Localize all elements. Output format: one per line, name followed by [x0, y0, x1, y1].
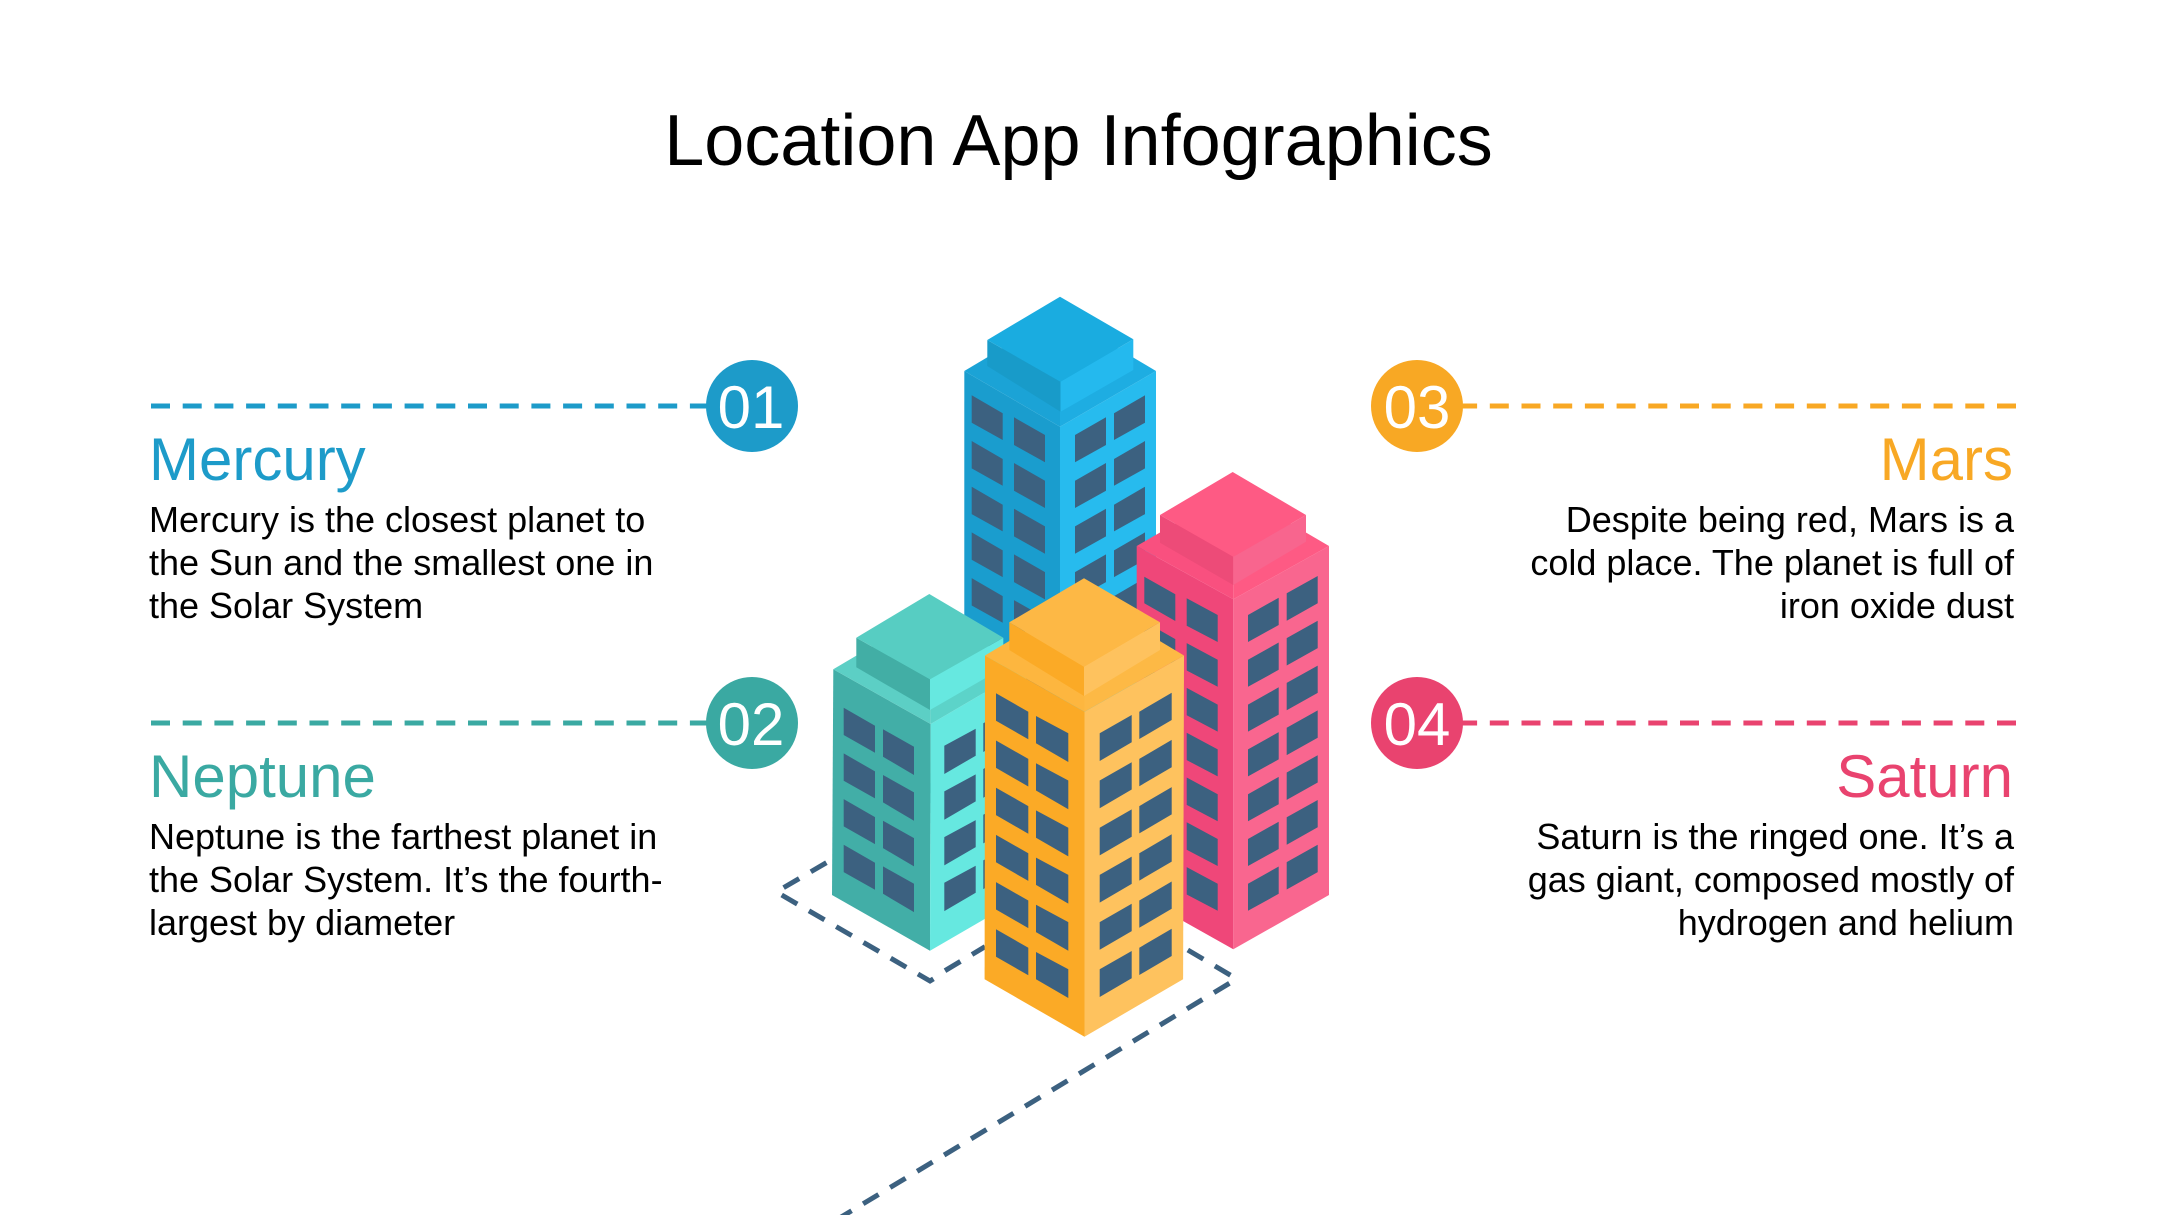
heading: Saturn: Saturn	[1836, 743, 2013, 810]
number badge 03: 03	[1384, 374, 1450, 441]
description: Neptune: Neptune is the farthest planet in	[149, 816, 657, 857]
heading: Mercury: Mercury	[149, 426, 366, 493]
number badge 04: 04	[1384, 691, 1450, 758]
item 03: Mars	[1371, 360, 2016, 626]
item 02: Neptune	[149, 677, 798, 943]
number badge 02: 02	[718, 691, 784, 758]
number badge 01: 01	[718, 374, 784, 441]
item 04: Saturn	[1371, 677, 2016, 943]
number badge 02	[706, 677, 798, 769]
dashed ground path	[782, 863, 1231, 1215]
description: Saturn: Saturn is the ringed one. It’s a	[1536, 816, 2015, 857]
description: Mars: cold place. The planet is full of	[1530, 542, 2015, 583]
item 01: Mercury	[149, 360, 798, 626]
building: teal	[832, 594, 1026, 951]
building: blue	[964, 297, 1156, 740]
number badge 04	[1371, 677, 1463, 769]
number badge 01	[706, 360, 798, 452]
description: Mercury: the Sun and the smallest one in	[149, 542, 653, 583]
isometric buildings illustration	[832, 297, 1329, 1037]
number badge 03	[1371, 360, 1463, 452]
building: pink	[1137, 472, 1329, 949]
description: Saturn: hydrogen and helium	[1678, 902, 2014, 943]
description: Mercury: Mercury is the closest planet to	[149, 499, 645, 540]
building: orange	[985, 578, 1184, 1037]
title: Location App Infographics	[664, 101, 1493, 181]
heading: Neptune: Neptune	[149, 743, 376, 810]
description: Saturn: gas giant, composed mostly of	[1528, 859, 2015, 900]
heading: Mars: Mars	[1880, 426, 2013, 493]
description: Mercury: the Solar System	[149, 585, 423, 626]
description: Mars: iron oxide dust	[1780, 585, 2014, 626]
description: Mars: Despite being red, Mars is a	[1566, 499, 2015, 540]
description: Neptune: largest by diameter	[149, 902, 455, 943]
description: Neptune: the Solar System. It’s the fourth-	[149, 859, 663, 900]
